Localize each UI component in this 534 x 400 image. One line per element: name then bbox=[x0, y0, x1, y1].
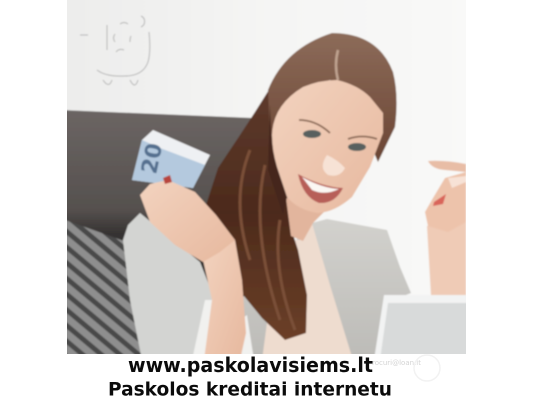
website address: www.paskolavisiems.lt bbox=[128, 353, 373, 377]
eyes bbox=[303, 130, 321, 138]
banknote bbox=[132, 130, 210, 188]
smile bbox=[298, 174, 343, 203]
photo background wall bbox=[67, 0, 432, 294]
red nails bbox=[433, 194, 446, 206]
finger gap bbox=[448, 176, 466, 188]
dark hair beside face bbox=[268, 109, 288, 201]
sleeve bbox=[123, 213, 215, 360]
photo advert: woman holding a banknote bbox=[67, 0, 466, 396]
face bbox=[272, 80, 383, 213]
stock watermark: rocuri@loan.lt bbox=[372, 359, 421, 367]
neck bbox=[285, 198, 324, 242]
photograph bbox=[60, 0, 475, 360]
caption area bbox=[108, 353, 392, 400]
blouse bbox=[262, 223, 353, 360]
raised arm bbox=[427, 220, 466, 295]
raised hand bbox=[425, 172, 466, 232]
office chair mesh bbox=[67, 220, 141, 354]
sofa back bbox=[67, 109, 252, 297]
tagline: Paskolos kreditai internetu bbox=[108, 378, 392, 400]
laptop bbox=[374, 294, 466, 354]
eyebrows bbox=[299, 120, 377, 139]
forearm bbox=[203, 240, 246, 360]
blazer body bbox=[240, 219, 411, 360]
red fingernail bbox=[163, 175, 172, 184]
raised finger bbox=[428, 161, 466, 172]
woman bbox=[123, 33, 466, 360]
long hair bbox=[206, 85, 307, 340]
banknote: 20 bbox=[137, 141, 168, 176]
head hair bbox=[268, 33, 397, 162]
stock watermark bbox=[372, 355, 440, 381]
hair strands bbox=[240, 150, 295, 330]
white cuff bbox=[193, 300, 254, 354]
watermark: shopping cart logo bbox=[80, 16, 150, 85]
hand holding note bbox=[140, 180, 235, 262]
hair parting highlight bbox=[336, 50, 338, 80]
nose bbox=[323, 155, 345, 176]
